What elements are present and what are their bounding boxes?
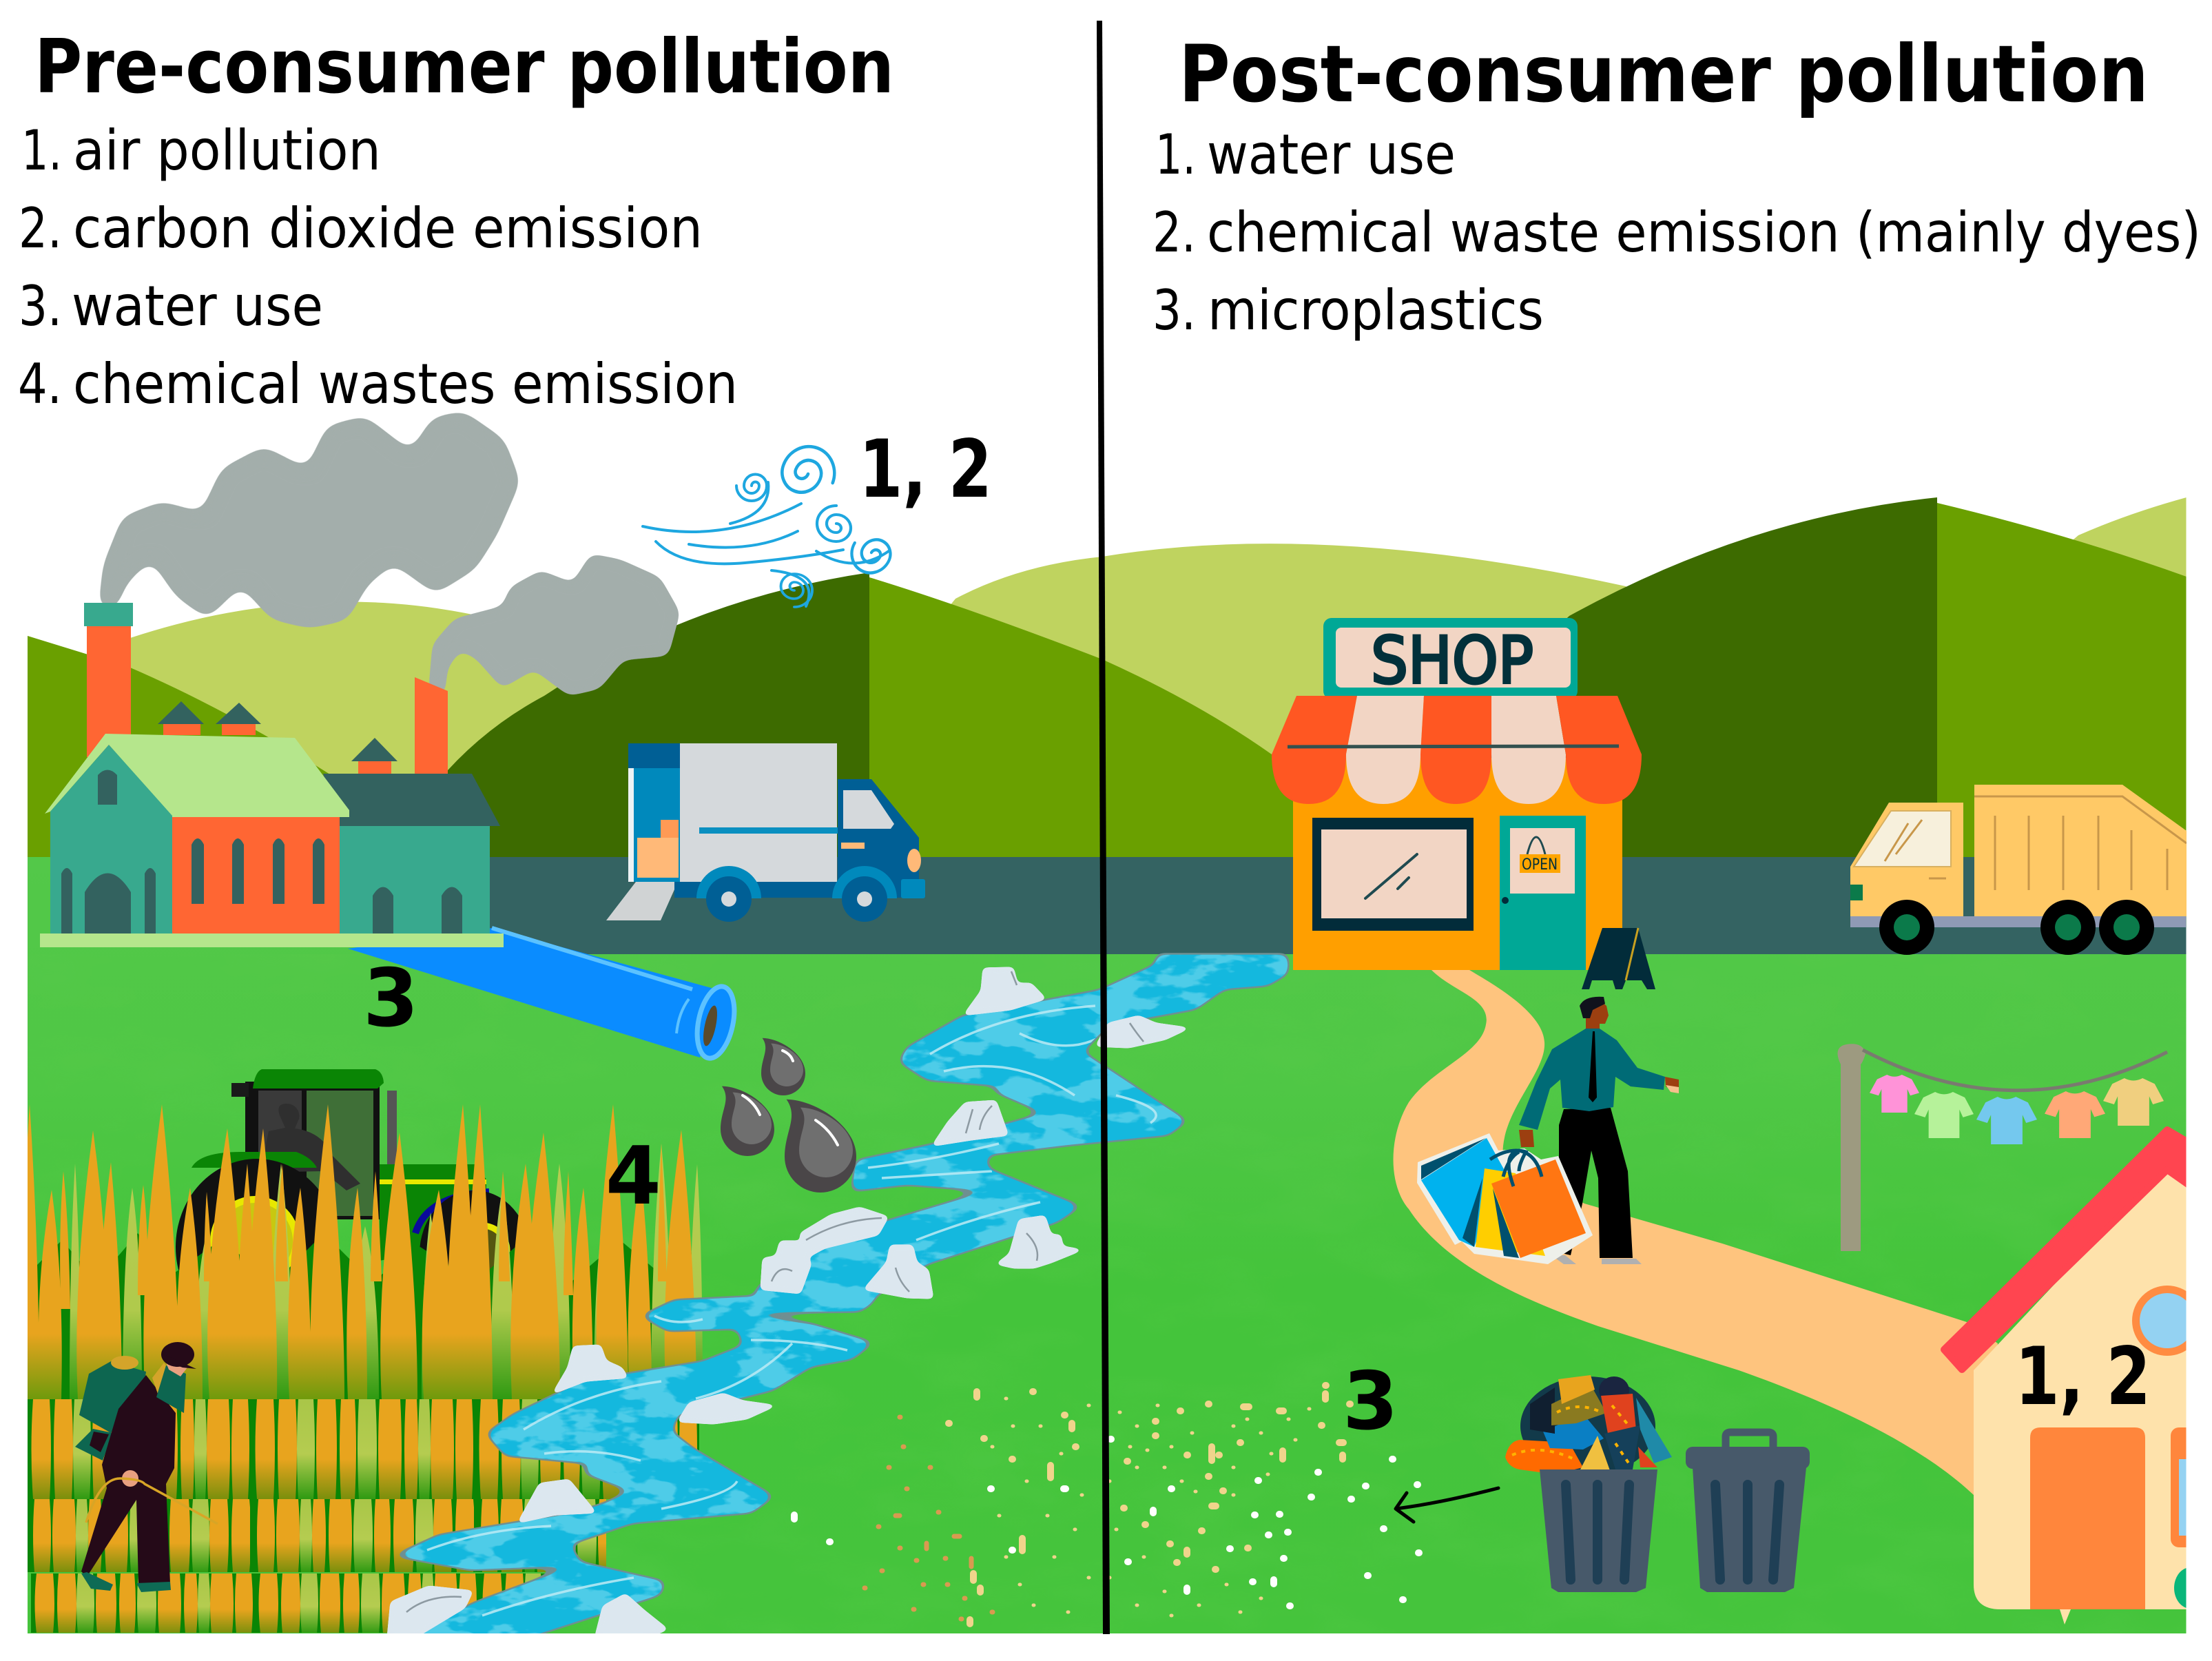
annex body bbox=[340, 826, 490, 934]
apron mask bbox=[152, 1363, 169, 1396]
path to house bbox=[1393, 970, 1998, 1495]
clothes pile bbox=[1505, 1375, 1672, 1476]
side window bbox=[2171, 1427, 2198, 1547]
sign board bbox=[1323, 618, 1578, 699]
head and hands bbox=[1519, 998, 1679, 1147]
icon: house bbox=[1944, 1130, 2207, 1624]
icon: delivery truck bbox=[606, 743, 925, 922]
label: 4 pre-consumer: 4 bbox=[606, 1130, 661, 1223]
front wheel bbox=[420, 1190, 530, 1317]
list: post-consumer pollution sources bbox=[1152, 123, 2201, 342]
round window bbox=[2132, 1286, 2202, 1356]
hill: large light right half bbox=[869, 577, 1293, 857]
chimney 1 bbox=[87, 626, 131, 757]
list item 2: carbon dioxide emission bbox=[73, 196, 703, 260]
cab bbox=[245, 1082, 380, 1219]
river bbox=[395, 955, 1288, 1640]
icon: trash bin with clothes bbox=[1505, 1375, 1672, 1592]
list item 1: 1. bbox=[21, 118, 62, 183]
rope bbox=[1863, 1050, 2167, 1091]
shop window bbox=[1312, 818, 1474, 931]
label: 1, 2 post-consumer: 1, 2 bbox=[2015, 1330, 2151, 1423]
sign text: SHOP bbox=[1371, 623, 1533, 699]
figure: farmer spraying bbox=[75, 1342, 218, 1592]
gable front bbox=[50, 745, 172, 934]
list item 2: 2. bbox=[19, 196, 62, 260]
main roof bbox=[45, 734, 349, 817]
blue shirt bbox=[1976, 1097, 2037, 1144]
brown flecks bbox=[865, 1417, 993, 1619]
page edge mask bbox=[2187, 413, 2212, 1661]
label: 3 post-consumer: 3 bbox=[1343, 1355, 1398, 1448]
shop body bbox=[1293, 758, 1622, 970]
divider bbox=[1097, 21, 1110, 1634]
list item 4: 4. bbox=[18, 352, 62, 416]
icon: garbage truck bbox=[1850, 785, 2187, 955]
shoes bbox=[81, 1572, 171, 1592]
hill: second light right half bbox=[1937, 503, 2187, 861]
white flecks bbox=[794, 1439, 1419, 1606]
smoke: small factory plume bbox=[428, 554, 680, 696]
tan shirt bbox=[2103, 1078, 2164, 1126]
shoes bbox=[1551, 1255, 1642, 1264]
list item 2: 2. bbox=[1152, 200, 1196, 265]
shrub bbox=[2174, 1567, 2207, 1609]
shop door bbox=[1500, 816, 1586, 970]
icon: sandwich board bbox=[1582, 928, 1655, 989]
list item 4: chemical wastes emission bbox=[73, 352, 738, 416]
label: 3 pre-consumer: 3 bbox=[363, 952, 419, 1045]
list item 1: water use bbox=[1207, 123, 1456, 187]
shopping bags bbox=[1417, 1133, 1593, 1264]
backpack bbox=[79, 1361, 146, 1433]
arrow: toward microplastics bbox=[1396, 1488, 1498, 1522]
label: 1, 2 pre-consumer: 1, 2 bbox=[859, 423, 992, 516]
hill: second dark left half bbox=[1491, 497, 1937, 857]
icon: empty trash bin bbox=[1686, 1432, 1810, 1592]
spray hose bbox=[86, 1478, 218, 1524]
bin body bbox=[1540, 1469, 1657, 1592]
thin blade tips bbox=[60, 1144, 667, 1309]
factory base bbox=[40, 933, 504, 947]
hill: light green right bbox=[2074, 497, 2187, 577]
hood bbox=[380, 1164, 486, 1261]
green shirt bbox=[1914, 1092, 1974, 1138]
icon: tractor bbox=[176, 1069, 530, 1335]
awning bbox=[1272, 696, 1642, 804]
dark annex roof bbox=[323, 774, 500, 826]
tie bbox=[1589, 1031, 1597, 1102]
roof vents bbox=[158, 701, 397, 761]
grass ground bbox=[28, 857, 2187, 1633]
list item 1: air pollution bbox=[73, 118, 381, 183]
title: pre-consumer pollution: Pre-consumer pollution bbox=[34, 24, 894, 110]
list: pre-consumer pollution sources bbox=[18, 118, 738, 416]
icon: wind swirls bbox=[643, 439, 896, 607]
lower crop rows bbox=[26, 1399, 707, 1633]
list item 3: 3. bbox=[1152, 278, 1196, 342]
rock folds bbox=[406, 971, 1144, 1612]
icon: discharge pipe bbox=[348, 928, 740, 1062]
list item 3: water use bbox=[72, 274, 323, 338]
scene: landscape background bbox=[28, 497, 2187, 1633]
hill: green far left bbox=[28, 636, 329, 857]
cream flecks bbox=[949, 1385, 1350, 1624]
road bbox=[482, 857, 2187, 954]
rocks bbox=[387, 967, 1190, 1638]
suit bbox=[81, 1375, 176, 1585]
list item 3: microplastics bbox=[1208, 278, 1544, 342]
list item 3: 3. bbox=[19, 274, 62, 338]
roof bbox=[1944, 1130, 2191, 1370]
hair bbox=[1580, 997, 1605, 1018]
hill: light green centre bbox=[951, 544, 1626, 758]
pole bbox=[1838, 1044, 1865, 1251]
ripples bbox=[427, 1006, 1156, 1616]
hill: large dark left half bbox=[448, 573, 869, 857]
orange shirt bbox=[2045, 1091, 2105, 1138]
smoke: large factory plume bbox=[99, 411, 520, 628]
icon: clothesline bbox=[1838, 1044, 2167, 1251]
door bbox=[2030, 1427, 2145, 1609]
open tag: OPEN bbox=[1522, 856, 1558, 874]
icon: shop bbox=[1272, 618, 1642, 970]
exhaust bbox=[387, 1091, 397, 1192]
shirt bbox=[1519, 1029, 1665, 1130]
icon: oil drops bbox=[721, 1038, 856, 1193]
walls bbox=[1974, 1164, 2191, 1609]
icon: factory bbox=[40, 603, 504, 947]
pink shirt bbox=[1870, 1075, 1919, 1113]
list item 1: 1. bbox=[1155, 123, 1196, 187]
orange hall with windows bbox=[172, 817, 340, 934]
crop field bbox=[20, 1104, 707, 1633]
microplastics scatter bbox=[794, 1385, 1419, 1624]
figure: shopper bbox=[1417, 997, 1679, 1264]
hand bbox=[122, 1470, 138, 1487]
chimney 2 bbox=[415, 677, 448, 775]
hat and head bbox=[165, 1361, 187, 1376]
top crop row with spikes bbox=[20, 1104, 703, 1399]
rear wheel bbox=[192, 1152, 317, 1168]
legs bbox=[1559, 1108, 1633, 1258]
hill: light green left bbox=[131, 602, 557, 774]
